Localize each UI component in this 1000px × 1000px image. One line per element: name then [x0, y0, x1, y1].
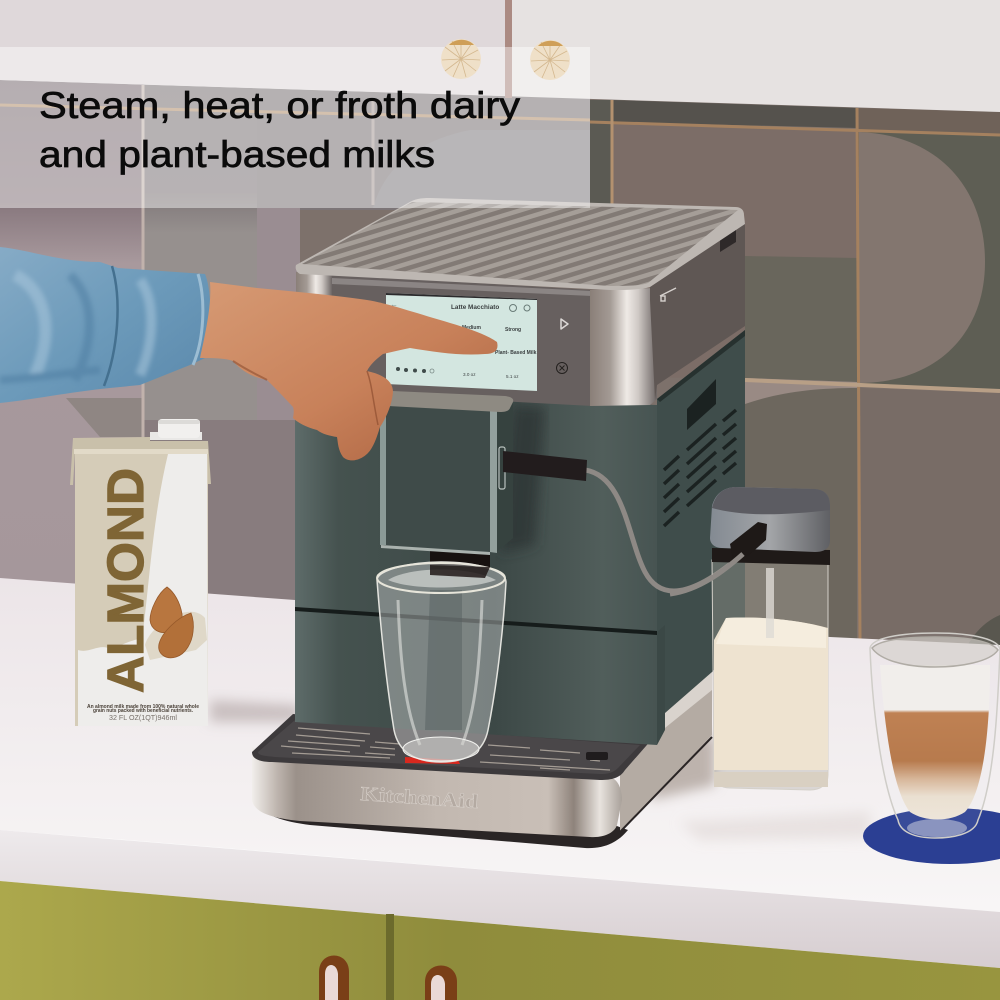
coffee machine	[252, 198, 745, 848]
coaster	[863, 808, 1000, 864]
red cup marker	[405, 757, 460, 764]
cabinet handle right	[425, 966, 457, 1000]
touchscreen: 3.0 oz	[463, 372, 476, 377]
milk hose	[585, 470, 745, 591]
frother cast shadow	[500, 405, 545, 553]
jug glass	[712, 560, 828, 790]
touchscreen: Plant- Based Milk	[495, 350, 537, 356]
cabinet knob right	[530, 40, 570, 80]
carton cap	[150, 419, 202, 440]
touchscreen: Medium	[462, 325, 481, 331]
play button icon	[561, 319, 568, 329]
carton small print: An almond milk made from 100% natural whole	[87, 704, 199, 710]
hose connector	[503, 451, 587, 481]
arm and pointing hand	[0, 247, 498, 460]
tiled wall background	[0, 0, 1000, 660]
lid top	[296, 198, 745, 290]
body side panel	[657, 330, 745, 720]
cancel button icon	[556, 362, 568, 374]
base right side	[620, 672, 712, 832]
jug lid	[710, 487, 830, 552]
carton small print: grain nuts packed with beneficial nutrients.	[93, 708, 194, 714]
title: Steam, heat, or froth dairy	[39, 85, 521, 126]
cabinet knob left	[441, 39, 481, 79]
wall grout lines	[0, 85, 1000, 640]
touchscreen: Strong	[505, 327, 521, 333]
latte glass	[870, 633, 1000, 838]
hand	[200, 282, 498, 460]
almonds	[150, 587, 193, 658]
carton small print: 32 FL OZ(1QT)946ml	[109, 715, 177, 722]
KitchenAid logo: KitchenAid	[360, 783, 479, 813]
carton small print	[87, 704, 199, 722]
head side panel	[650, 222, 745, 400]
ALMOND label: ALMOND	[97, 468, 154, 693]
milk jug	[670, 487, 830, 790]
title	[39, 85, 521, 175]
title: and plant-based milks	[39, 134, 435, 175]
progress dots	[396, 367, 434, 373]
cabinet handle left	[319, 956, 349, 1000]
touchscreen: Latte Macchiato	[451, 304, 499, 311]
base black foot	[254, 800, 628, 848]
base chrome front	[252, 747, 622, 837]
touchscreen	[386, 293, 537, 391]
countertop front edge	[0, 830, 1000, 968]
jug hose connector	[730, 522, 767, 560]
jug milk	[714, 617, 828, 787]
head front panel	[296, 272, 592, 406]
almond milk carton	[70, 419, 211, 726]
side latch icon	[660, 288, 676, 301]
side window and vents	[664, 379, 736, 526]
touchscreen: ←	[390, 300, 398, 309]
upper cabinets	[0, 0, 1000, 112]
empty glass cup	[377, 562, 506, 762]
countertop surface	[0, 578, 1000, 912]
touchscreen: 5.1 oz	[506, 374, 519, 379]
body front	[295, 395, 657, 632]
jug black band	[712, 548, 830, 565]
drip tray	[252, 714, 653, 780]
denim sleeve	[0, 247, 210, 403]
lower olive cabinets	[0, 881, 1000, 1000]
milk frother block	[380, 391, 513, 567]
translucent headline panel	[0, 47, 590, 208]
denim mottling	[0, 275, 151, 380]
almond splash	[145, 612, 207, 660]
counter shadows	[210, 700, 870, 840]
head chrome column	[590, 288, 657, 406]
